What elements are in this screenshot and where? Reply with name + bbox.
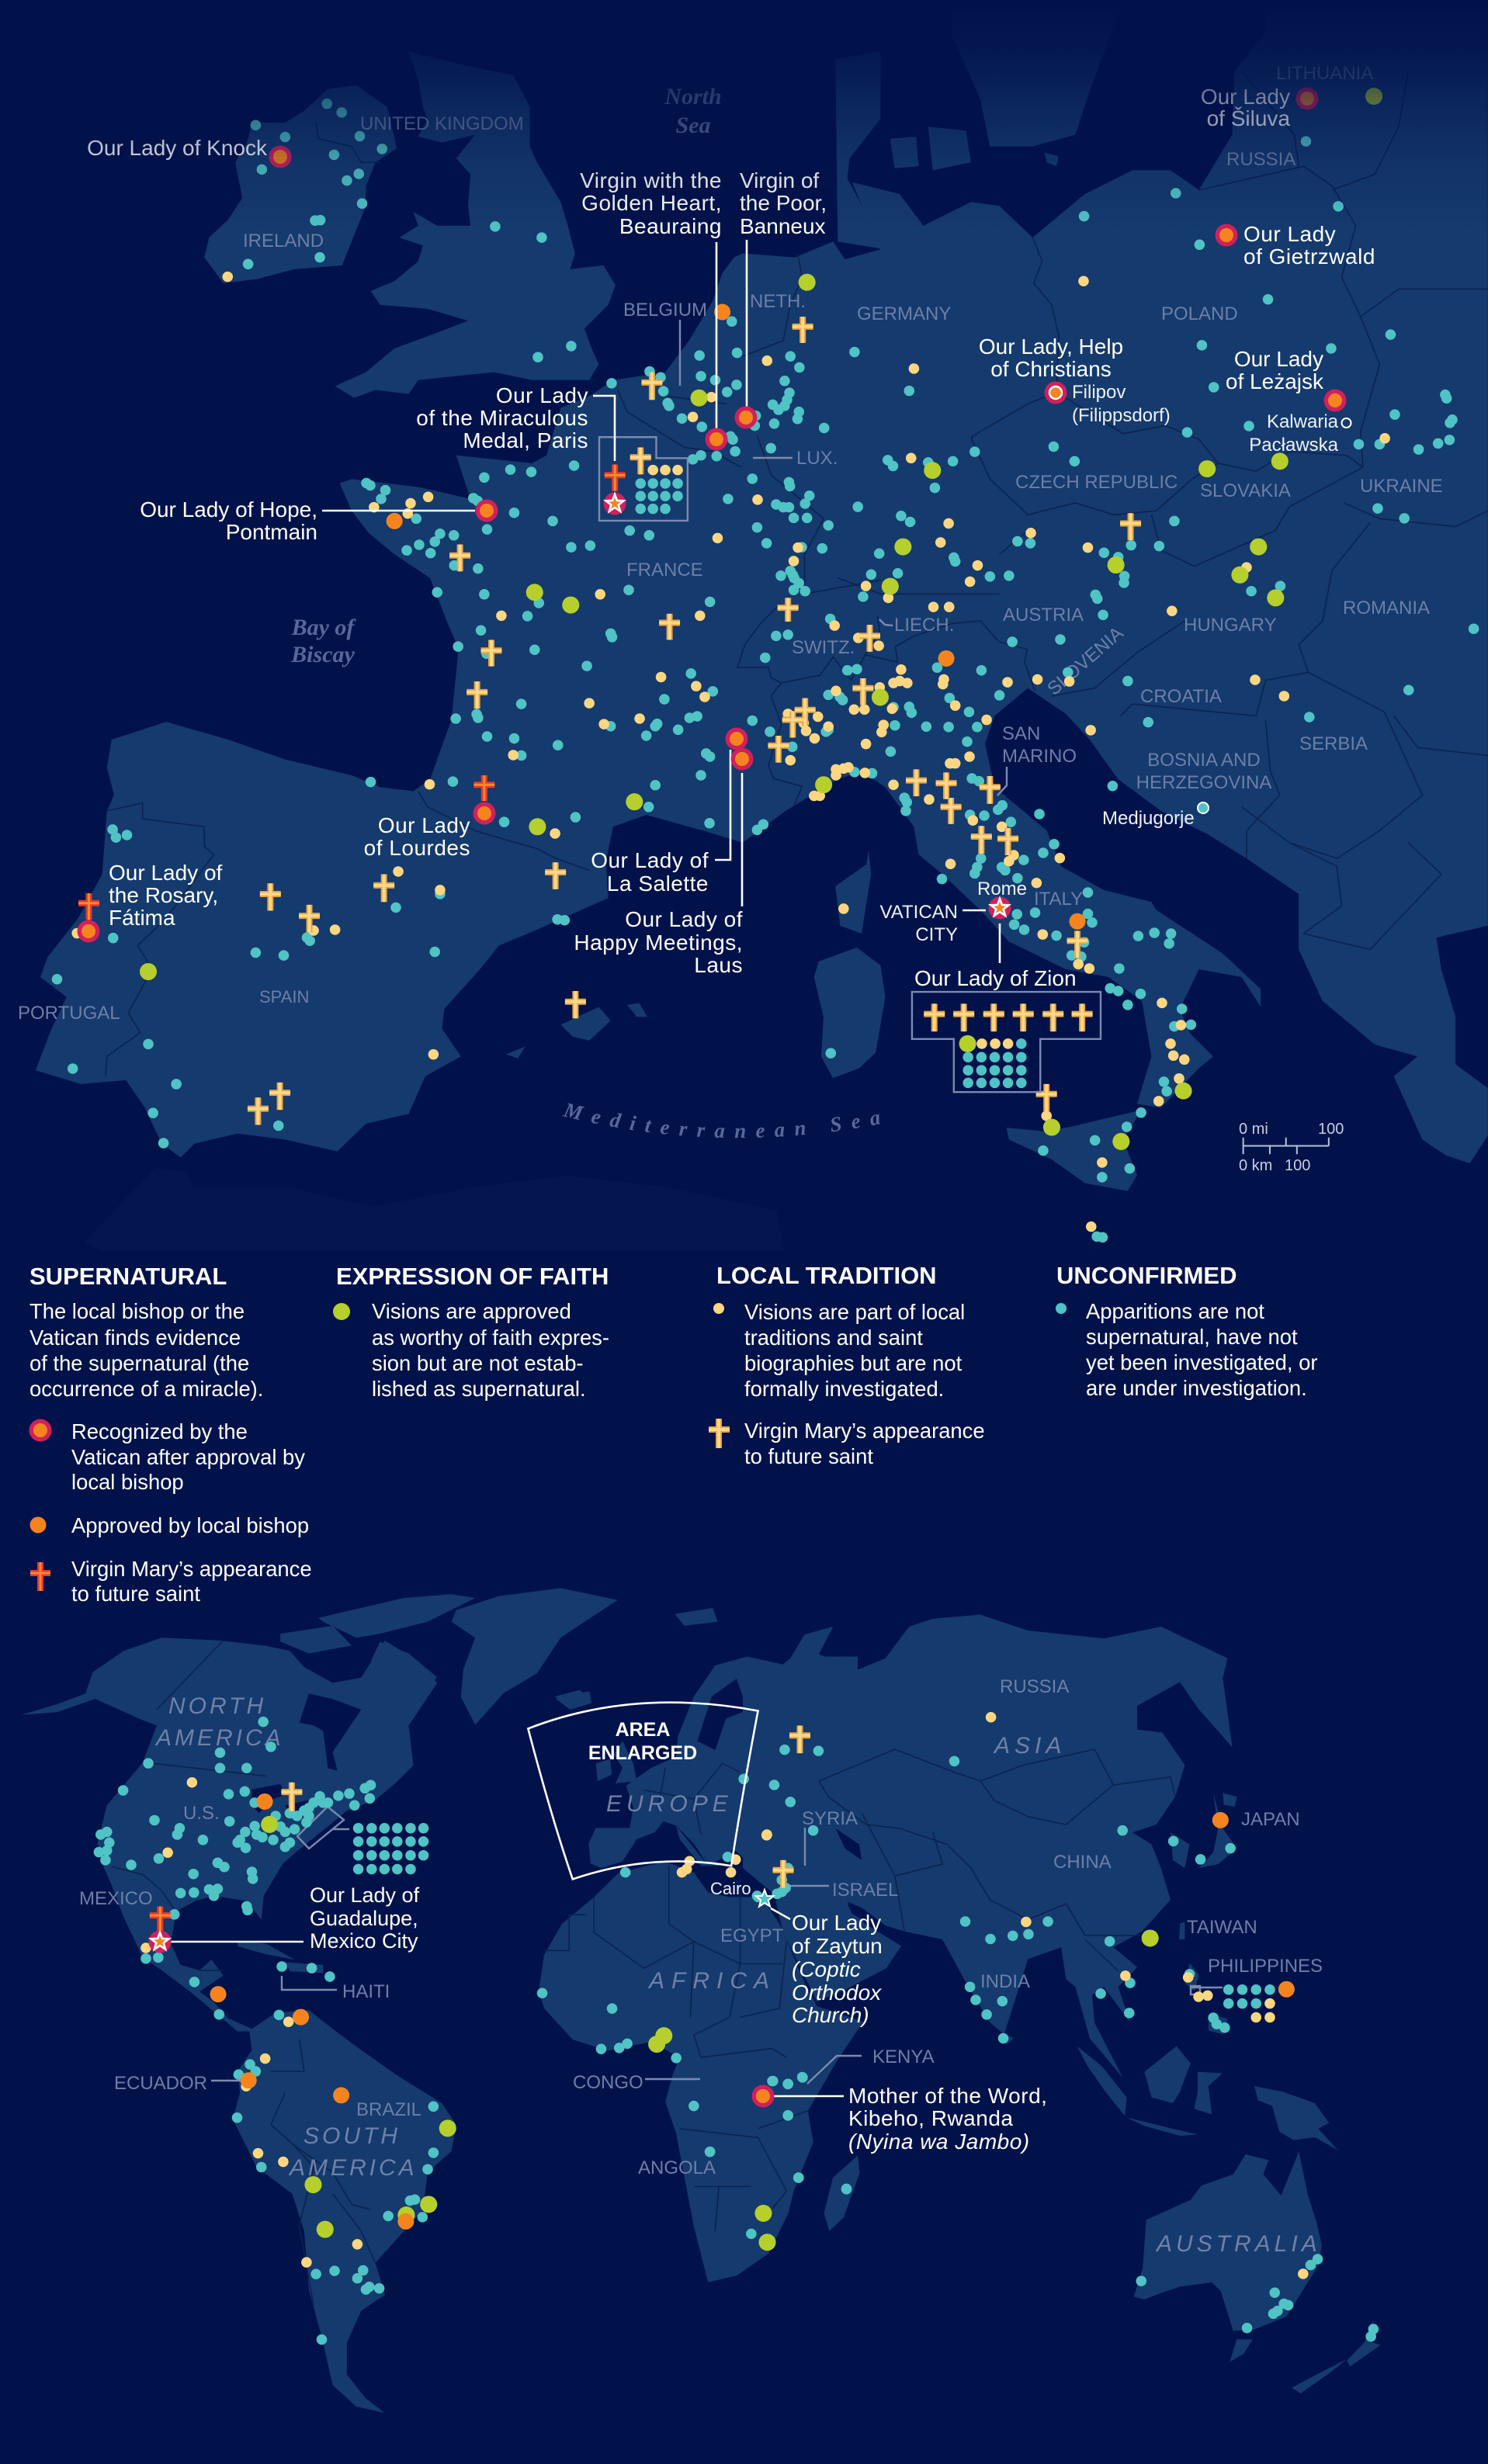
legend: expression of faith: EXPRESSION OF FAITH: [336, 1263, 609, 1290]
callout labels, Europe: Rome: [977, 879, 1027, 899]
Europe country and sea labels: ROMANIA: [1343, 598, 1430, 619]
world callouts: Guadalupe,: [310, 1907, 418, 1930]
Europe country and sea labels: UNITED KINGDOM: [360, 113, 524, 134]
world callouts: (Coptic: [792, 1957, 861, 1981]
Europe country and sea labels: Biscay: [290, 642, 356, 667]
map: Europe country borders: [106, 71, 1488, 1076]
world map labels: [79, 1676, 1323, 2257]
world map labels: TAIWAN: [1187, 1917, 1257, 1938]
callout labels, Europe: the Poor,: [740, 191, 827, 215]
world map labels: EGYPT: [720, 1925, 784, 1946]
callout labels, Europe: Our Lady: [378, 813, 470, 837]
world dots: Africa east: [710, 1779, 846, 2242]
callout labels, Europe: Our Lady: [1234, 347, 1323, 371]
Europe country and sea labels: FRANCE: [626, 560, 703, 580]
world map labels: MEXICO: [79, 1888, 153, 1909]
Scandinavia and Denmark: [835, 0, 1123, 249]
area enlarged frame: AREA: [616, 1719, 670, 1741]
legend: unconfirmed: UNCONFIRMED: [1056, 1262, 1237, 1289]
world map: Asia: [743, 1615, 1237, 2078]
legend: expression of faith: lished as supernatural.: [372, 1377, 586, 1401]
world dots: Americas and west Africa: [99, 1722, 736, 2340]
callout labels, Europe: Our Lady of Hope,: [140, 497, 317, 522]
Europe country and sea labels: SPAIN: [259, 987, 309, 1007]
world map: Europe and Africa: [539, 1656, 901, 2282]
world map labels: NORTH: [168, 1693, 266, 1719]
callout labels, Europe: Happy Meetings,: [574, 930, 743, 955]
callout labels, Europe: Banneux: [740, 214, 826, 238]
scale bar: 0 mi: [1239, 1121, 1268, 1138]
scale bar: 100: [1285, 1157, 1310, 1174]
world map labels: PHILIPPINES: [1208, 1956, 1323, 1977]
world map labels: AFRICA: [647, 1968, 776, 1994]
callout labels, Europe: of Šiluva: [1207, 106, 1290, 130]
legend: supernatural: Vatican finds evidence: [29, 1326, 241, 1350]
Europe country and sea labels: SAN: [1002, 723, 1040, 744]
Mediterranean and Baltic islands: [814, 851, 1142, 1191]
legend: supernatural: local bishop: [71, 1470, 184, 1494]
Europe country and sea labels: GERMANY: [857, 303, 951, 324]
Europe country and sea labels: LITHUANIA: [1276, 63, 1373, 84]
world map labels: RUSSIA: [1000, 1676, 1069, 1697]
world map labels: INDIA: [980, 1971, 1030, 1992]
Europe country and sea labels: CZECH REPUBLIC: [1015, 472, 1178, 493]
world map labels: AMERICA: [288, 2155, 418, 2181]
Europe country and sea labels: NETH.: [750, 291, 806, 312]
Europe country and sea labels: SWITZ.: [792, 637, 855, 658]
legend: supernatural: SUPERNATURAL: [29, 1263, 227, 1290]
callout labels, Europe: Filipov: [1072, 382, 1126, 403]
callout labels, Europe: Our Lady of Zion: [914, 966, 1077, 990]
callout labels, Europe: Medjugorje: [1102, 808, 1195, 829]
world map labels: ECUADOR: [114, 2073, 207, 2094]
callout labels, Europe: Our Lady of: [625, 907, 743, 931]
world dots: Oceania: [1141, 2259, 1373, 2337]
inset box: Paris area: [599, 437, 688, 521]
world map labels: ASIA: [993, 1733, 1066, 1759]
world callouts: (Nyina wa Jambo): [848, 2130, 1030, 2154]
white callout leader lines, Europe: [322, 240, 1000, 963]
callout labels, Europe: Pontmain: [226, 520, 317, 544]
Europe country and sea labels: POLAND: [1161, 303, 1238, 324]
Europe country and sea labels: Bay of: [291, 615, 356, 640]
legend: expression of faith: as worthy of faith expres-: [372, 1326, 609, 1350]
callout labels, Europe: Virgin of: [740, 168, 819, 192]
world map labels: SOUTH: [303, 2123, 401, 2149]
Europe: dots, north-east: [752, 96, 1452, 622]
callout labels, Europe: of Leżajsk: [1226, 369, 1324, 393]
world map labels: JAPAN: [1241, 1809, 1300, 1830]
Europe gray leader lines: [680, 320, 1007, 795]
callout labels, Europe: La Salette: [607, 872, 709, 896]
world map labels: BRAZIL: [356, 2099, 421, 2120]
legend: supernatural: Recognized by the: [71, 1419, 248, 1443]
world map labels: AMERICA: [154, 1725, 284, 1751]
legend: local tradition: biographies but are not: [744, 1351, 963, 1375]
red saint crosses, Europe: [78, 464, 626, 920]
Europe country and sea labels: CROATIA: [1140, 686, 1222, 707]
legend: unconfirmed: supernatural, have not: [1086, 1325, 1298, 1349]
world map labels: HAITI: [342, 1981, 390, 2002]
legend: local tradition: Visions are part of local: [744, 1300, 965, 1324]
legend: supernatural: Virgin Mary’s appearance: [71, 1557, 312, 1581]
area enlarged frame: ENLARGED: [588, 1742, 697, 1764]
top fade over Europe map: [0, 0, 1488, 233]
island: Great Britain: [335, 51, 616, 398]
map: Europe landmass: [36, 0, 1488, 1251]
callout labels, Europe: VATICAN: [880, 902, 958, 923]
callout labels, Europe: Kalwaria: [1267, 411, 1339, 432]
legend: supernatural: of the supernatural (the: [29, 1351, 249, 1375]
callout labels, Europe: Our Lady: [1201, 85, 1290, 109]
world map labels: SYRIA: [802, 1808, 858, 1829]
world map labels: AUSTRALIA: [1155, 2231, 1321, 2257]
world map labels: ISRAEL: [832, 1880, 898, 1901]
Europe country and sea labels: AUSTRIA: [1003, 605, 1084, 626]
Europe: unconfirmed and tradition dots, north-west: [227, 104, 737, 616]
area enlarged frame: [528, 1703, 758, 1879]
Europe country and sea labels: LIECH.: [894, 615, 954, 636]
legend: local tradition: LOCAL TRADITION: [716, 1262, 937, 1289]
Europe country and sea labels: Sea: [675, 113, 711, 138]
Europe country and sea labels: SERBIA: [1299, 733, 1368, 754]
world map labels: ANGOLA: [638, 2157, 716, 2178]
legend: expression of faith: sion but are not estab-: [372, 1351, 584, 1375]
world map: Americas: [22, 1637, 456, 2413]
callout labels, Europe: Golden Heart,: [581, 191, 722, 215]
callout labels, Europe: Our Lady of: [109, 861, 223, 885]
callout labels, Europe: Beauraing: [619, 214, 722, 238]
scale bar: [1239, 1121, 1344, 1174]
legend: local tradition: Virgin Mary’s appearance: [744, 1419, 985, 1443]
world map labels: KENYA: [872, 2046, 935, 2067]
callout labels, Europe: Virgin with the: [580, 168, 722, 192]
Europe country and sea labels: SLOVAKIA: [1200, 480, 1291, 501]
legend: supernatural: to future saint: [71, 1582, 200, 1606]
callout labels, Europe: of the Miraculous: [416, 406, 588, 430]
legend: local tradition: traditions and saint: [744, 1326, 923, 1350]
legend: local tradition: to future saint: [744, 1444, 873, 1468]
world map labels: CHINA: [1053, 1852, 1112, 1873]
inset box: Rome area: [912, 992, 1101, 1092]
legend: expression of faith: Visions are approved: [372, 1299, 571, 1323]
legend: unconfirmed: [1056, 1262, 1317, 1400]
world map: Oceania: [1077, 2046, 1380, 2393]
scale bar: 100: [1318, 1121, 1344, 1138]
callout labels, Europe: (Filippsdorf): [1072, 405, 1171, 426]
Europe country and sea labels: ITALY: [1034, 889, 1083, 910]
callout labels, Europe: Fátima: [109, 906, 175, 930]
callout labels, Europe: of Gietrzwald: [1243, 244, 1375, 269]
Europe country and sea labels: HERZEGOVINA: [1136, 772, 1271, 793]
callout labels, Europe: the Rosary,: [109, 883, 218, 907]
world callouts: Cairo: [710, 1879, 751, 1898]
callout labels, Europe: Pacławska: [1249, 435, 1339, 456]
world callouts: Mexico City: [310, 1929, 418, 1953]
world map: Arctic and Greenland: [280, 1588, 717, 1724]
callout labels, Europe: Our Lady of: [591, 848, 709, 872]
Europe country and sea labels: MARINO: [1002, 746, 1077, 767]
legend: unconfirmed: Apparitions are not: [1086, 1299, 1264, 1323]
callout labels, Europe: Our Lady of Knock: [87, 136, 268, 160]
callout labels, Europe: [87, 85, 1375, 990]
callout labels, Europe: Our Lady, Help: [979, 334, 1123, 359]
legend: supernatural: The local bishop or the: [29, 1299, 245, 1323]
world callouts: Orthodox: [792, 1981, 882, 2005]
world map labels: CONGO: [573, 2072, 643, 2093]
Europe country and sea labels: [18, 63, 1443, 1138]
legend: expression of faith: [333, 1263, 609, 1401]
callout labels, Europe: of Lourdes: [364, 836, 470, 860]
callout labels, Europe: Our Lady: [1243, 222, 1336, 246]
legend: supernatural: Vatican after approval by: [71, 1445, 305, 1469]
world callouts: of Zaytun: [792, 1934, 883, 1958]
legend: local tradition: formally investigated.: [744, 1377, 944, 1401]
Europe country and sea labels: HUNGARY: [1184, 615, 1277, 636]
legend: supernatural: occurrence of a miracle).: [29, 1377, 263, 1401]
callout labels, Europe: CITY: [915, 924, 958, 945]
legend: supernatural: [29, 1263, 312, 1606]
world callouts: Mother of the Word,: [848, 2084, 1047, 2108]
world callouts: Our Lady of: [310, 1884, 420, 1907]
world callouts: Kibeho, Rwanda: [848, 2106, 1013, 2130]
world map gray leader lines and inset boxes: [211, 1807, 1223, 2084]
supernatural markers, Europe: [78, 87, 1351, 942]
world callouts: Our Lady: [792, 1911, 881, 1935]
legend: supernatural: Approved by local bishop: [71, 1513, 309, 1537]
island: Ireland: [204, 85, 397, 283]
callout labels, Europe: Our Lady: [496, 383, 588, 407]
world callouts: Church): [792, 2003, 869, 2027]
world map labels: U.S.: [183, 1803, 220, 1824]
Europe: dots, south-west: [57, 614, 713, 1143]
callout labels, Europe: Laus: [694, 953, 743, 977]
world dots: Asia: [757, 1717, 1286, 2189]
legend: unconfirmed: are under investigation.: [1086, 1376, 1307, 1400]
Europe country and sea labels: BOSNIA AND: [1147, 750, 1261, 771]
callout labels, Europe: Medal, Paris: [463, 428, 588, 452]
Europe country and sea labels: North: [664, 84, 722, 109]
legend: unconfirmed: yet been investigated, or: [1086, 1350, 1317, 1374]
Europe country and sea labels: PORTUGAL: [18, 1003, 120, 1024]
callout labels, Europe: of Christians: [990, 357, 1112, 381]
world map labels: EUROPE: [606, 1791, 733, 1817]
Europe: dots, south-east including Italy: [752, 625, 1474, 1237]
Europe country and sea labels: LUX.: [796, 448, 838, 469]
Europe country and sea labels: IRELAND: [243, 230, 324, 251]
Europe country and sea labels: SLOVENIA: [1043, 622, 1128, 700]
legend: local tradition: [709, 1262, 985, 1468]
world callouts: [149, 1879, 1047, 2154]
scale bar: 0 km: [1239, 1157, 1272, 1174]
Europe country and sea labels: BELGIUM: [623, 300, 707, 321]
Europe country and sea labels: RUSSIA: [1226, 149, 1295, 170]
Europe country and sea labels: Mediterranean Sea: [562, 1104, 880, 1138]
Europe country and sea labels: UKRAINE: [1360, 476, 1443, 497]
